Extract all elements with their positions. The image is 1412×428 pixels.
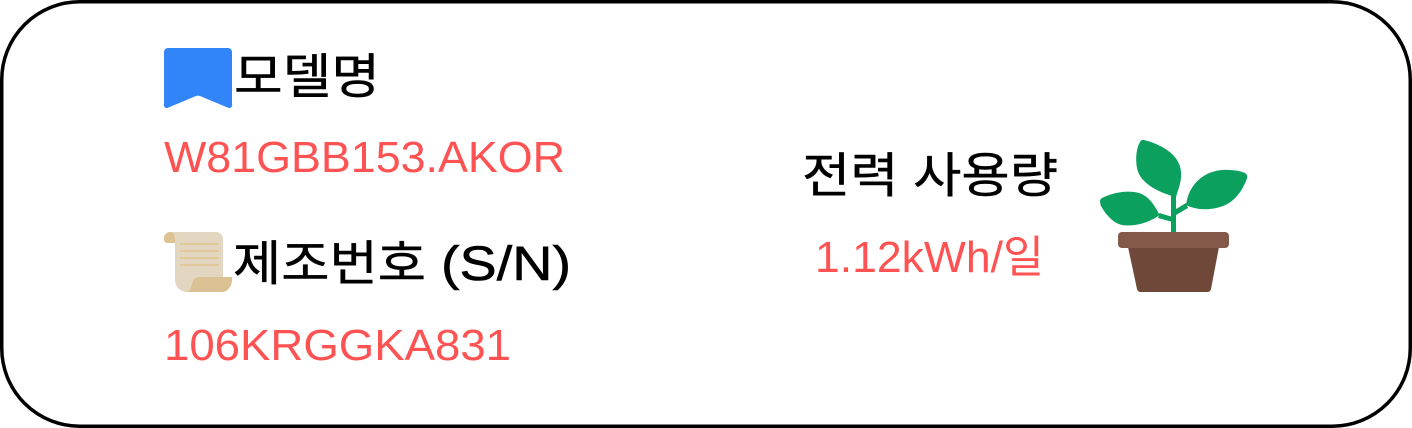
pot rim xyxy=(1118,232,1229,248)
icon: potted plant xyxy=(1100,140,1247,292)
heading: serial number: 제조번호 xyxy=(233,238,426,291)
heading: model name: 모델명 xyxy=(234,51,380,104)
icon: scroll xyxy=(164,232,232,292)
leaf: top xyxy=(1136,140,1181,197)
heading: serial number: (S/N) xyxy=(441,238,571,291)
leaf: right xyxy=(1186,170,1247,209)
serial number value: 106KRGGKA831 xyxy=(164,321,511,370)
pot body xyxy=(1128,247,1219,292)
stem xyxy=(1158,190,1188,232)
leaf: left xyxy=(1100,192,1160,225)
power usage value: 1.12kWh/일 xyxy=(815,233,1044,282)
heading: power usage: 전력 사용량 xyxy=(802,150,1058,203)
heading: serial number xyxy=(233,238,571,291)
model name value: W81GBB153.AKOR xyxy=(164,133,565,182)
icon: bookmark xyxy=(164,48,232,108)
